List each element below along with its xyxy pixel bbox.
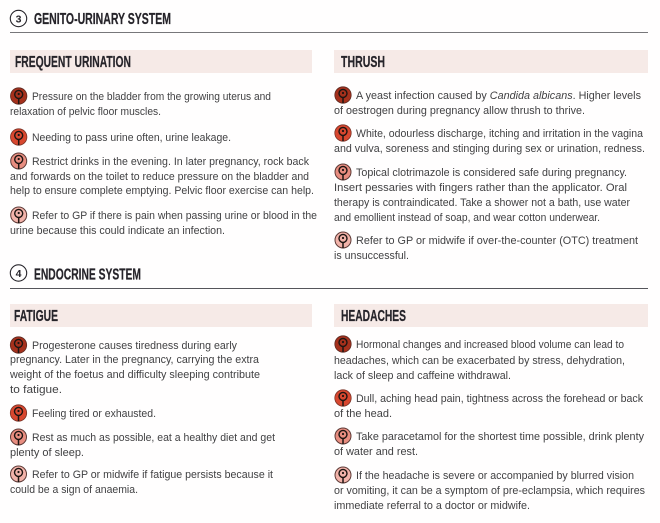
- text: referral: If the headache is severe or accompanied by blurred vision: [356, 470, 634, 482]
- text: referral: immediate referral to a doctor or midwife.: [334, 500, 530, 512]
- heading: thrush: THRUSH: [341, 54, 385, 71]
- icon: management: [335, 164, 351, 180]
- text: referral: [334, 235, 638, 262]
- text: management: and forwards on the toilet to reduce pressure on the bladder and: [10, 171, 309, 183]
- text: symptoms: and vulva, soreness and stinging during sex or urination, redness.: [334, 143, 645, 155]
- text: referral: could be a sign of anaemia.: [10, 484, 138, 496]
- text: management: [334, 431, 644, 458]
- section heading: genito-urinary system: 3: [16, 13, 22, 25]
- section heading: genito-urinary system: GENITO-URINARY SYSTEM: [34, 11, 171, 28]
- text: symptoms: of the head.: [334, 408, 392, 420]
- icon: management: [335, 428, 351, 444]
- heading: frequent urination: [10, 50, 312, 73]
- icon: symptom cause: [335, 336, 351, 352]
- heading: headaches: [334, 304, 648, 327]
- text: management: Restrict drinks in the evening. In later pregnancy, rock back: [32, 156, 309, 168]
- text: cause: relaxation of pelvic floor muscles.: [10, 106, 161, 118]
- text: cause: lack of sleep and caffeine withdrawal.: [334, 370, 511, 382]
- text: referral: [334, 470, 645, 512]
- text: cause: weight of the foetus and difficulty sleeping contribute: [9, 369, 260, 381]
- text: cause: Pressure on the bladder from the growing uterus and: [32, 91, 271, 103]
- text: symptoms: Needing to pass urine often, urine leakage.: [32, 132, 231, 144]
- text: cause: Progesterone causes tiredness during early: [32, 340, 237, 352]
- text: symptoms: White, odourless discharge, itching and irritation in the vagina: [356, 128, 644, 140]
- section heading: genito-urinary system: [10, 10, 648, 33]
- icon: referral: [11, 207, 27, 223]
- icon: symptoms: [10, 405, 27, 421]
- icon: management: [10, 429, 26, 445]
- text: cause: [9, 340, 260, 396]
- text: cause: [334, 90, 641, 117]
- text: cause: headaches, which can be exacerbated by stress, dehydration,: [334, 355, 625, 367]
- heading: headaches: HEADACHES: [341, 308, 406, 325]
- text: management: Topical clotrimazole is considered safe during pregnancy.: [356, 167, 627, 179]
- text: cause: of oestrogen during pregnancy allow thrush to thrive.: [334, 105, 585, 117]
- text: symptoms: Dull, aching head pain, tightness across the forehead or back: [356, 393, 643, 405]
- text: cause: [334, 339, 625, 382]
- text: management: and emollient instead of soap, and wear cotton underwear.: [334, 212, 600, 224]
- heading: thrush: [334, 50, 648, 73]
- text: cause: pregnancy. Later in the pregnancy, carrying the extra: [10, 354, 260, 366]
- icon: symptoms: [335, 390, 351, 406]
- text: cause: A yeast infection caused by Candida albicans. Higher levels: [356, 90, 641, 102]
- text: management: plenty of sleep.: [10, 447, 84, 459]
- text: management: Rest as much as possible, eat a healthy diet and get: [32, 432, 275, 444]
- text: referral: Refer to GP or midwife if over-the-counter (OTC) treatment: [356, 235, 638, 247]
- text: referral: is unsuccessful.: [334, 250, 409, 262]
- text: referral: Refer to GP or midwife if fatigue persists because it: [32, 469, 273, 481]
- section heading: endocrine system: ENDOCRINE SYSTEM: [34, 266, 141, 284]
- text: management: [334, 167, 630, 224]
- icon: symptom cause: [11, 88, 27, 104]
- heading: fatigue: [10, 304, 312, 327]
- icon: symptoms: [11, 129, 27, 145]
- heading: frequent urination: FREQUENT URINATION: [15, 54, 131, 71]
- text: symptoms: [334, 393, 643, 420]
- text: management: therapy is contraindicated. Take a shower not a bath, use water: [334, 197, 630, 209]
- text: management: [10, 432, 275, 459]
- text: referral: [10, 210, 317, 237]
- icon: symptoms: [335, 125, 351, 141]
- text: cause: Hormonal changes and increased blood volume can lead to: [356, 339, 624, 351]
- section heading: endocrine system: [10, 265, 648, 289]
- panel: fatigue: [9, 304, 312, 496]
- panel: frequent urination: [10, 50, 317, 237]
- icon: referral: [335, 467, 351, 483]
- section heading: endocrine system: 4: [16, 268, 22, 280]
- text: management: help to ensure complete emptying. Pelvic floor exercise can help.: [10, 185, 314, 197]
- text: referral: Refer to GP if there is pain when passing urine or blood in the: [32, 210, 317, 222]
- icon: symptom cause: [335, 87, 351, 103]
- text: symptoms: [334, 128, 645, 155]
- heading: fatigue: FATIGUE: [14, 308, 58, 325]
- text: cause: to fatigue.: [10, 384, 62, 396]
- icon: referral: [335, 232, 351, 248]
- text: referral: [10, 469, 273, 496]
- text: referral: or vomiting, it can be a symptom of pre-eclampsia, which requires: [334, 485, 645, 497]
- text: management: of water and rest.: [334, 446, 418, 458]
- panel: headaches: [334, 304, 648, 512]
- text: referral: urine because this could indicate an infection.: [10, 225, 225, 237]
- icon: symptom cause: [10, 337, 27, 353]
- text: management: [10, 156, 314, 197]
- text: symptoms: Feeling tired or exhausted.: [32, 408, 156, 420]
- text: cause: [10, 91, 271, 118]
- text: management: Insert pessaries with fingers rather than the applicator. Oral: [334, 182, 627, 194]
- text: management: Take paracetamol for the shortest time possible, drink plenty: [356, 431, 644, 443]
- icon: referral: [10, 466, 26, 482]
- icon: management: [11, 153, 27, 169]
- panel: thrush: [334, 50, 648, 262]
